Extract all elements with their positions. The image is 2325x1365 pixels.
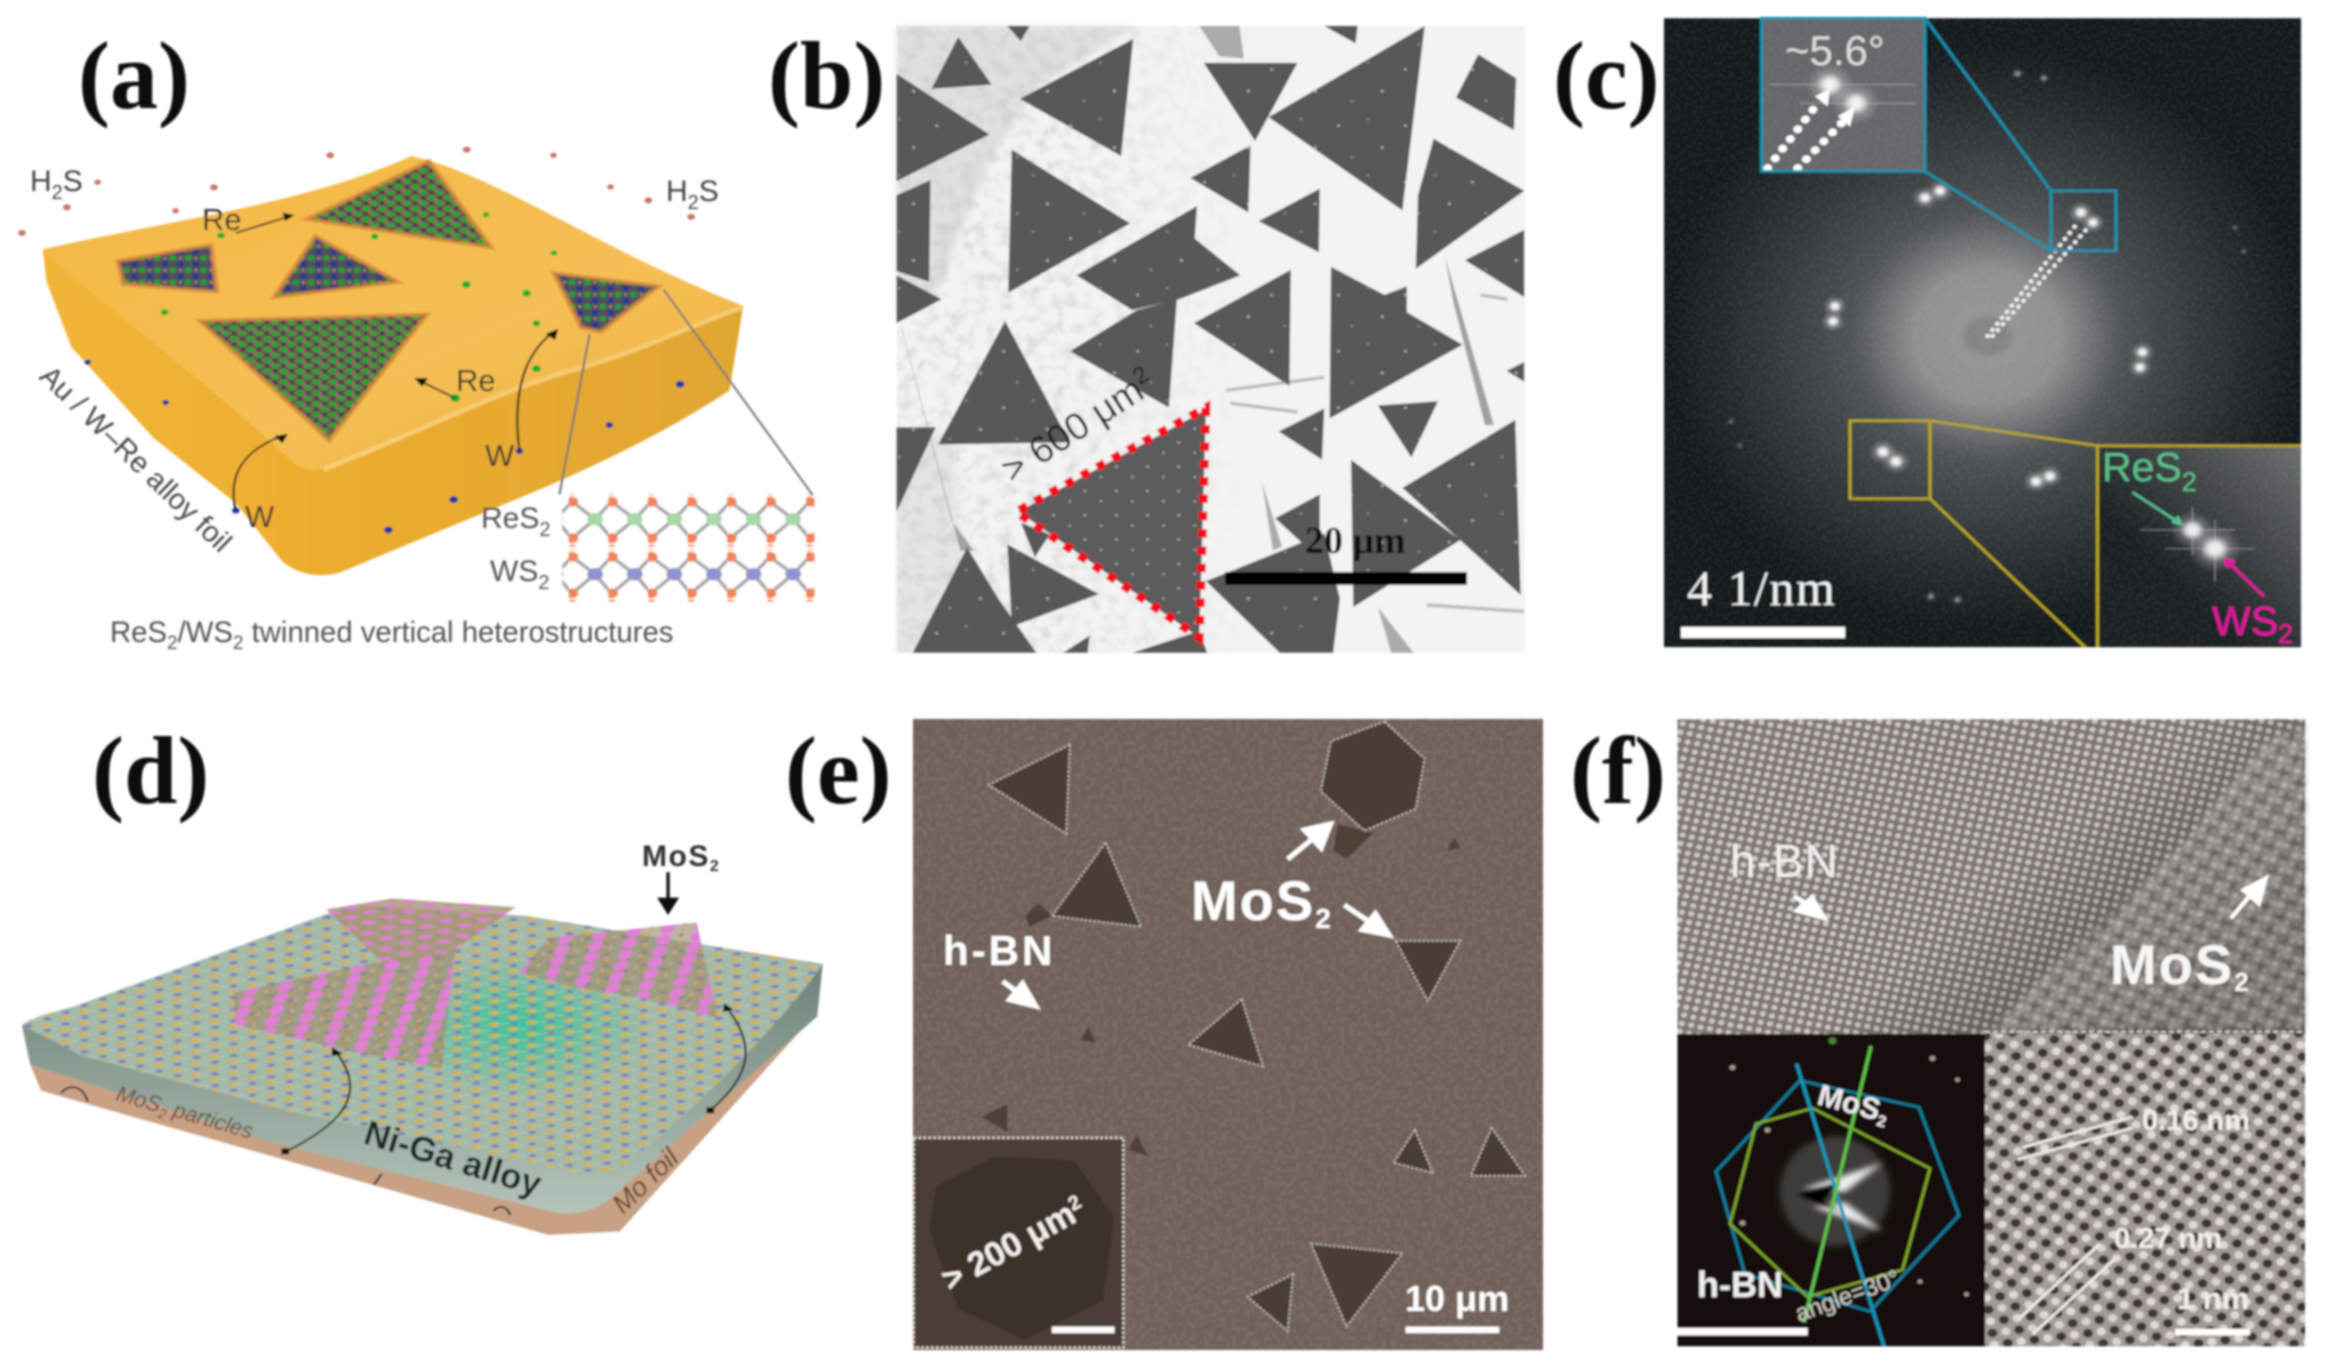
text: Ni-Ga alloy: Ni-Ga alloy	[360, 1113, 546, 1204]
text: H2S left: H	[30, 165, 52, 198]
TEM lattice and SAED inset	[1678, 719, 2305, 1346]
text: 20 um: 20 μm	[1305, 520, 1406, 562]
scale bar	[1225, 572, 1467, 585]
caption: ReS	[110, 616, 167, 649]
text: H2S right: H	[666, 175, 688, 208]
text: h-BN: h-BN	[943, 927, 1055, 974]
text: foil label: Au / W–Re alloy foil	[33, 360, 237, 559]
text: angle: ~5.6°	[1785, 27, 1885, 74]
text: H2S right: S	[699, 175, 719, 208]
panel: d, Ni-Ga alloy schematic	[22, 717, 823, 1235]
text: H2S right: 2	[688, 192, 699, 214]
text: MoS2: 2	[1315, 903, 1333, 934]
illustration: Au/W-Re foil with flakes	[18, 147, 815, 602]
text: ReS2: ReS	[481, 502, 539, 535]
text: MoS2: MoS	[1191, 869, 1315, 932]
illustration: layered foil and MoS2	[22, 872, 823, 1235]
text: MoS2: MoS	[2110, 933, 2234, 996]
text: ReS2 inset label: 2	[2182, 467, 2197, 497]
text: 0.27 nm: 0.27 nm	[2114, 1223, 2222, 1255]
text: MoS2: MoS	[642, 840, 710, 873]
micrograph of triangular flakes	[897, 26, 1524, 653]
text: angle: angle=30°	[1792, 1265, 1904, 1328]
panel: e, SEM image	[785, 717, 1543, 1350]
text: ReS2: 2	[539, 519, 550, 541]
text: W right: W	[485, 438, 515, 473]
text: Re right: Re	[456, 363, 496, 398]
text: area label: 2	[1065, 1191, 1085, 1216]
text: h-BN: h-BN	[1730, 835, 1839, 887]
text: h-BN inset: h-BN	[1697, 1264, 1783, 1305]
label: (a): (a)	[78, 22, 190, 129]
text: scale: 10 μm	[1405, 1278, 1509, 1319]
text: area label: > 200 μm	[935, 1195, 1082, 1299]
caption: twinned vertical heterostructures	[244, 616, 673, 649]
text: H2S left: 2	[52, 182, 63, 204]
diffraction image	[1664, 18, 2305, 647]
SEM texture	[913, 719, 1543, 1350]
label: (e): (e)	[785, 717, 892, 824]
text: W left: W	[245, 499, 275, 534]
text: scale: 4 1/nm	[1687, 560, 1836, 616]
panel: a, gold foil schematic	[18, 22, 815, 654]
text: MoS2 particles: particles	[165, 1095, 256, 1144]
caption: /WS	[178, 616, 233, 649]
text: WS2 inset label: 2	[2278, 619, 2293, 649]
text: 0.16 nm: 0.16 nm	[2142, 1105, 2250, 1137]
text: H2S left: S	[63, 165, 83, 198]
text: WS2: WS	[490, 555, 538, 588]
SEM background	[913, 719, 1543, 1350]
text: Re top: Re	[202, 202, 242, 237]
label: (c): (c)	[1553, 22, 1660, 129]
text: MoS2: 2	[710, 858, 720, 875]
grain over diffraction image	[1664, 18, 2301, 647]
text: MoS2 particles: 2	[155, 1105, 168, 1122]
micrograph background	[897, 26, 1525, 653]
panel: c, FFT pattern	[1553, 18, 2305, 649]
text: Mo foil: Mo foil	[606, 1142, 685, 1219]
text: area label: > 600 μm	[994, 369, 1151, 492]
caption: 2	[233, 633, 244, 654]
flakes outlined with dotted lines	[914, 722, 1525, 1348]
text: MoS2 particles: MoS	[114, 1081, 164, 1117]
text: area label: 2	[1128, 361, 1154, 391]
text: MoS2 inset: 2	[1875, 1113, 1888, 1131]
label: (b): (b)	[768, 22, 885, 129]
panel: b, optical micrograph	[768, 22, 1525, 653]
label: (f): (f)	[1570, 717, 1666, 824]
text: 1 nm: 1 nm	[2177, 1281, 2249, 1316]
text: MoS2: 2	[2234, 967, 2251, 997]
text: WS2: 2	[538, 572, 549, 594]
text: WS2 inset label: WS	[2212, 598, 2278, 644]
text: ReS2 inset label: ReS	[2102, 444, 2182, 490]
caption: 2	[167, 633, 178, 654]
text: MoS2 inset: MoS	[1814, 1079, 1884, 1127]
label: (d): (d)	[92, 717, 209, 824]
scale bar	[1681, 627, 1845, 638]
panel: f, TEM image	[1570, 717, 2305, 1346]
